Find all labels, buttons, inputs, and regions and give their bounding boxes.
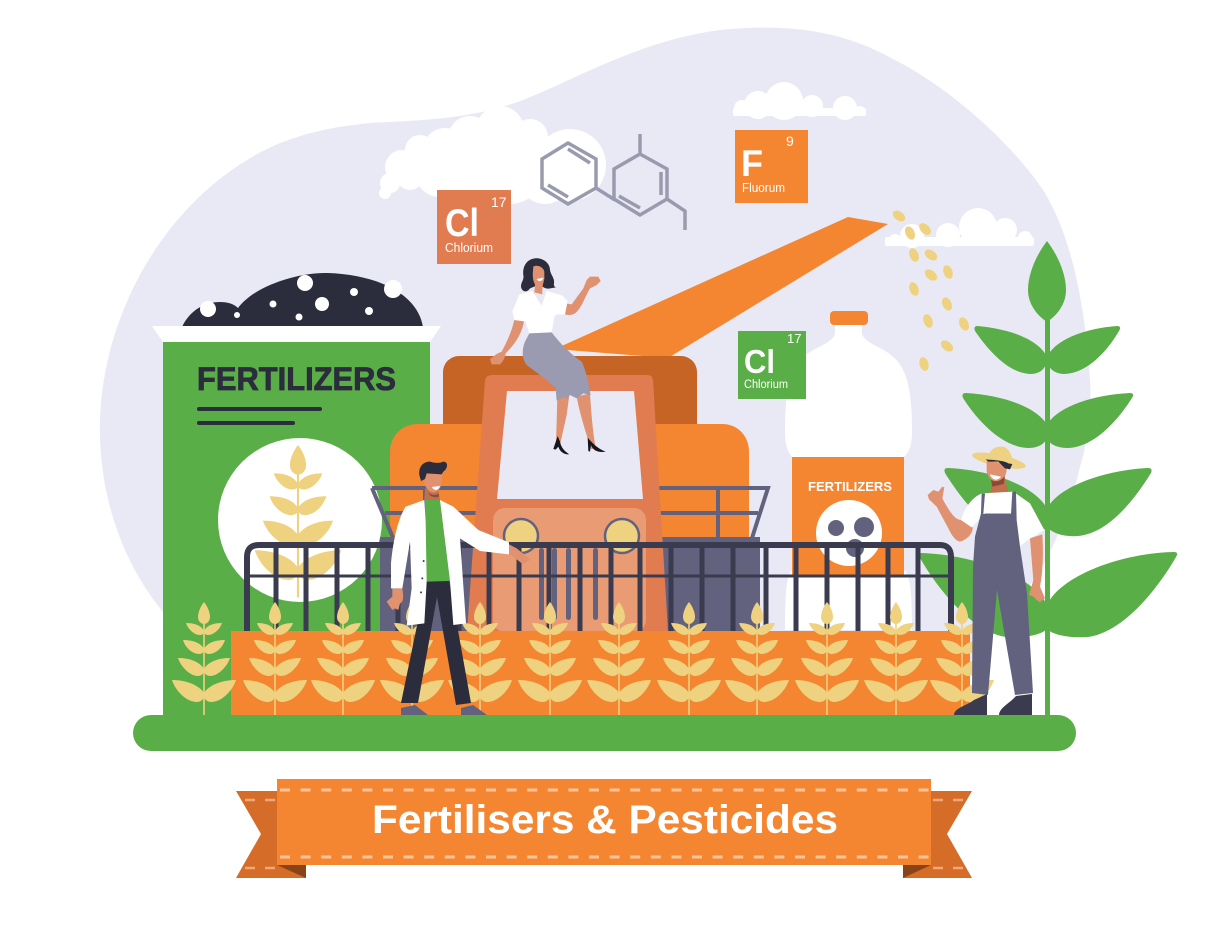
lavender background blob	[100, 28, 1091, 715]
element tile: Chlorine, green	[738, 331, 806, 399]
woman sitting on the cab	[490, 258, 606, 454]
green plant	[919, 241, 1177, 716]
element tile: Chlorine, orange: Chlorium	[445, 241, 493, 255]
element tile: Chlorine, orange: 17	[491, 194, 507, 210]
farmer in overalls	[928, 447, 1045, 715]
ground bar	[133, 715, 1076, 751]
element tile: Fluorine: F	[741, 143, 763, 184]
orange field band	[231, 631, 970, 715]
banner title: Fertilisers & Pesticides	[372, 798, 838, 842]
element tile: Chlorine, green: 17	[787, 331, 801, 346]
scientist in lab coat	[387, 462, 531, 715]
fertilizer bottle: FERTILIZERS	[808, 479, 892, 494]
right cloud	[885, 208, 1034, 248]
metal fence	[247, 545, 951, 632]
element tile: Fluorine: 9	[786, 133, 794, 149]
fertilizer sack	[152, 273, 441, 715]
element tile: Chlorine, green: Chlorium	[744, 379, 788, 391]
element tile: Fluorine	[735, 130, 808, 203]
wheat row	[172, 602, 994, 715]
fertilizer sack: FERTILIZERS	[197, 361, 396, 397]
central cloud	[379, 106, 606, 205]
falling seeds	[891, 208, 971, 372]
fertilizer bottle	[785, 311, 912, 630]
element tile: Chlorine, green: Cl	[744, 343, 775, 380]
element tile: Chlorine, orange: Cl	[445, 202, 479, 245]
orange spray chute	[555, 217, 888, 358]
ribbon banner	[236, 779, 972, 878]
element tile: Fluorine: Fluorum	[742, 181, 785, 195]
element tile: Chlorine, orange	[437, 190, 511, 264]
top right cloud	[733, 82, 866, 120]
harvester machine	[372, 356, 768, 632]
molecule diagram	[542, 134, 685, 230]
